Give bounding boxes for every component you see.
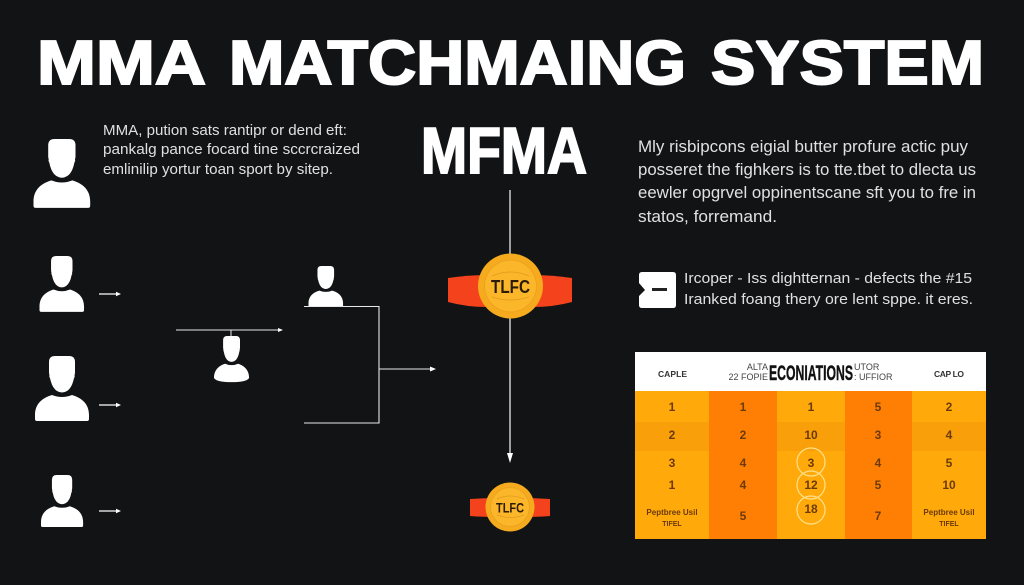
table values: 1 <box>669 400 676 414</box>
table values: TIFEL <box>939 521 959 528</box>
table header: UTOR <box>854 362 880 372</box>
arrow 3 <box>99 509 121 513</box>
heading: MFMA: MFMA <box>421 114 587 187</box>
table header <box>635 352 986 391</box>
text block: example: Ircoper - Iss dightternan - defects the #15 <box>684 270 972 287</box>
table values: 1 <box>669 478 676 492</box>
table values: 1 <box>740 400 747 414</box>
table header: 22 FOPIE <box>728 372 768 382</box>
icon: fighter 5 <box>308 266 343 307</box>
table values: 18 <box>804 502 818 516</box>
icon: fighter 4 <box>214 336 249 382</box>
table values: 3 <box>875 428 882 442</box>
table values: Peptbree Usil <box>923 508 975 517</box>
table values: 5 <box>875 478 882 492</box>
table values: Peptbree Usil <box>646 508 698 517</box>
table values: TIFEL <box>662 521 682 528</box>
icon: large belt: TLFC <box>491 277 530 297</box>
table header: ECONIATIONS <box>769 362 853 385</box>
text block: intro: pankalg pance focard tine sccrcraized <box>103 142 360 158</box>
bracket: final <box>304 306 436 423</box>
table values: 2 <box>740 428 747 442</box>
icon: fighter 1 <box>40 256 84 312</box>
table values: 4 <box>740 456 747 470</box>
text block: intro: MMA, pution sats rantipr or dend eft: <box>103 123 347 139</box>
text block: description: eewler opgrvel oppinentscane sft you to fre in <box>638 184 976 202</box>
table header: CAPLE <box>658 369 687 379</box>
table <box>635 352 986 539</box>
bracket: semifinal A <box>176 328 283 338</box>
table values: 10 <box>804 428 818 442</box>
text block: example <box>684 270 973 308</box>
table values: 2 <box>669 428 676 442</box>
icon: fighter 2 <box>35 356 89 421</box>
icon: small belt <box>470 482 550 532</box>
arrow 1 <box>99 292 121 296</box>
table values: 10 <box>942 478 956 492</box>
icon: fighter large <box>34 139 90 208</box>
table values <box>646 400 975 528</box>
text block: description: posseret the fighkers is to tte.tbet to dlecta us <box>638 161 976 179</box>
table values: 3 <box>808 456 815 470</box>
highlighted rankings <box>797 448 825 524</box>
title: MATCHMAING <box>229 29 686 98</box>
title: MMA <box>37 29 206 98</box>
table body <box>635 391 986 539</box>
table values: 5 <box>946 456 953 470</box>
text block: intro: emlinilip yortur toan sport by sitep. <box>103 162 333 178</box>
icon: fighter 3 <box>41 475 83 527</box>
table values: 5 <box>740 509 747 523</box>
table values: 2 <box>946 400 953 414</box>
arrow 2 <box>99 403 121 407</box>
text block: intro <box>103 123 360 178</box>
text block: description: statos, forremand. <box>638 208 777 226</box>
title: SYSTEM <box>711 29 984 98</box>
table header: CAP LO <box>934 369 964 379</box>
table header: : UFFIOR <box>854 372 893 382</box>
icon: ticket <box>639 272 676 308</box>
text block: example: Iranked foang thery ore lent sppe. it eres. <box>684 291 973 308</box>
table values: 4 <box>875 456 882 470</box>
table values: 4 <box>946 428 953 442</box>
table values: 7 <box>875 509 882 523</box>
text block: description <box>638 138 976 226</box>
table values: 4 <box>740 478 747 492</box>
arrow: vertical to title belt <box>507 190 513 463</box>
title <box>37 29 984 98</box>
icon: large belt <box>448 254 572 318</box>
table values: 1 <box>808 400 815 414</box>
table values: 12 <box>804 478 818 492</box>
text block: description: Mly risbipcons eigial butter profure actic puy <box>638 138 969 156</box>
icon: small belt: TLFC <box>496 500 524 516</box>
table values: 3 <box>669 456 676 470</box>
table header: ALTA <box>747 362 768 372</box>
table values: 5 <box>875 400 882 414</box>
